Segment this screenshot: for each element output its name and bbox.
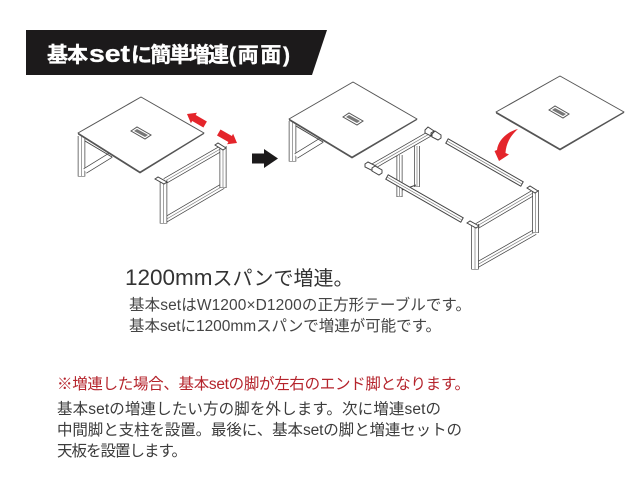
table 2 top <box>289 82 417 158</box>
illustration: base table with detachable leg <box>78 97 237 224</box>
text block: description: 基本setに1200mmスパンで増連が可能です。 <box>129 317 441 335</box>
table 1 top <box>78 97 204 174</box>
text block: instructions: 中間脚と支柱を設置。最後に、基本setの脚と増連セットの <box>57 421 462 439</box>
text block: instructions <box>57 400 462 460</box>
right leg frame <box>467 186 538 270</box>
heading: 1200mm span: 1200mmスパンで増連。 <box>125 265 354 290</box>
title banner: set <box>89 41 130 68</box>
detached leg frame <box>155 143 226 224</box>
title banner: 基本 <box>47 44 88 67</box>
icon: red curved arrow <box>494 129 518 161</box>
title banner: (両面) <box>229 44 290 67</box>
middle crossbar <box>365 127 441 175</box>
text block: instructions: 基本setの増連したい方の脚を外します。次に増連setの <box>57 400 441 418</box>
middle leg posts <box>400 146 417 197</box>
title banner <box>26 30 327 75</box>
table 3 top <box>496 76 624 150</box>
icon: red double arrows <box>187 113 237 144</box>
icon: black right arrow <box>252 149 278 168</box>
title banner: に簡単増連 <box>131 44 229 67</box>
support rail back <box>446 139 523 186</box>
illustration: table with extension parts <box>289 76 624 270</box>
support rail front <box>386 175 463 222</box>
red note: ※増連した場合、基本setの脚が左右のエンド脚となります。 <box>57 375 470 393</box>
text block: description: 基本setはW1200×D1200の正方形テーブルです。 <box>129 295 471 314</box>
text block: instructions: 天板を設置します。 <box>57 442 187 460</box>
table 1 left leg <box>82 136 112 176</box>
text block: description <box>129 295 471 335</box>
table 2 left leg <box>292 121 323 162</box>
